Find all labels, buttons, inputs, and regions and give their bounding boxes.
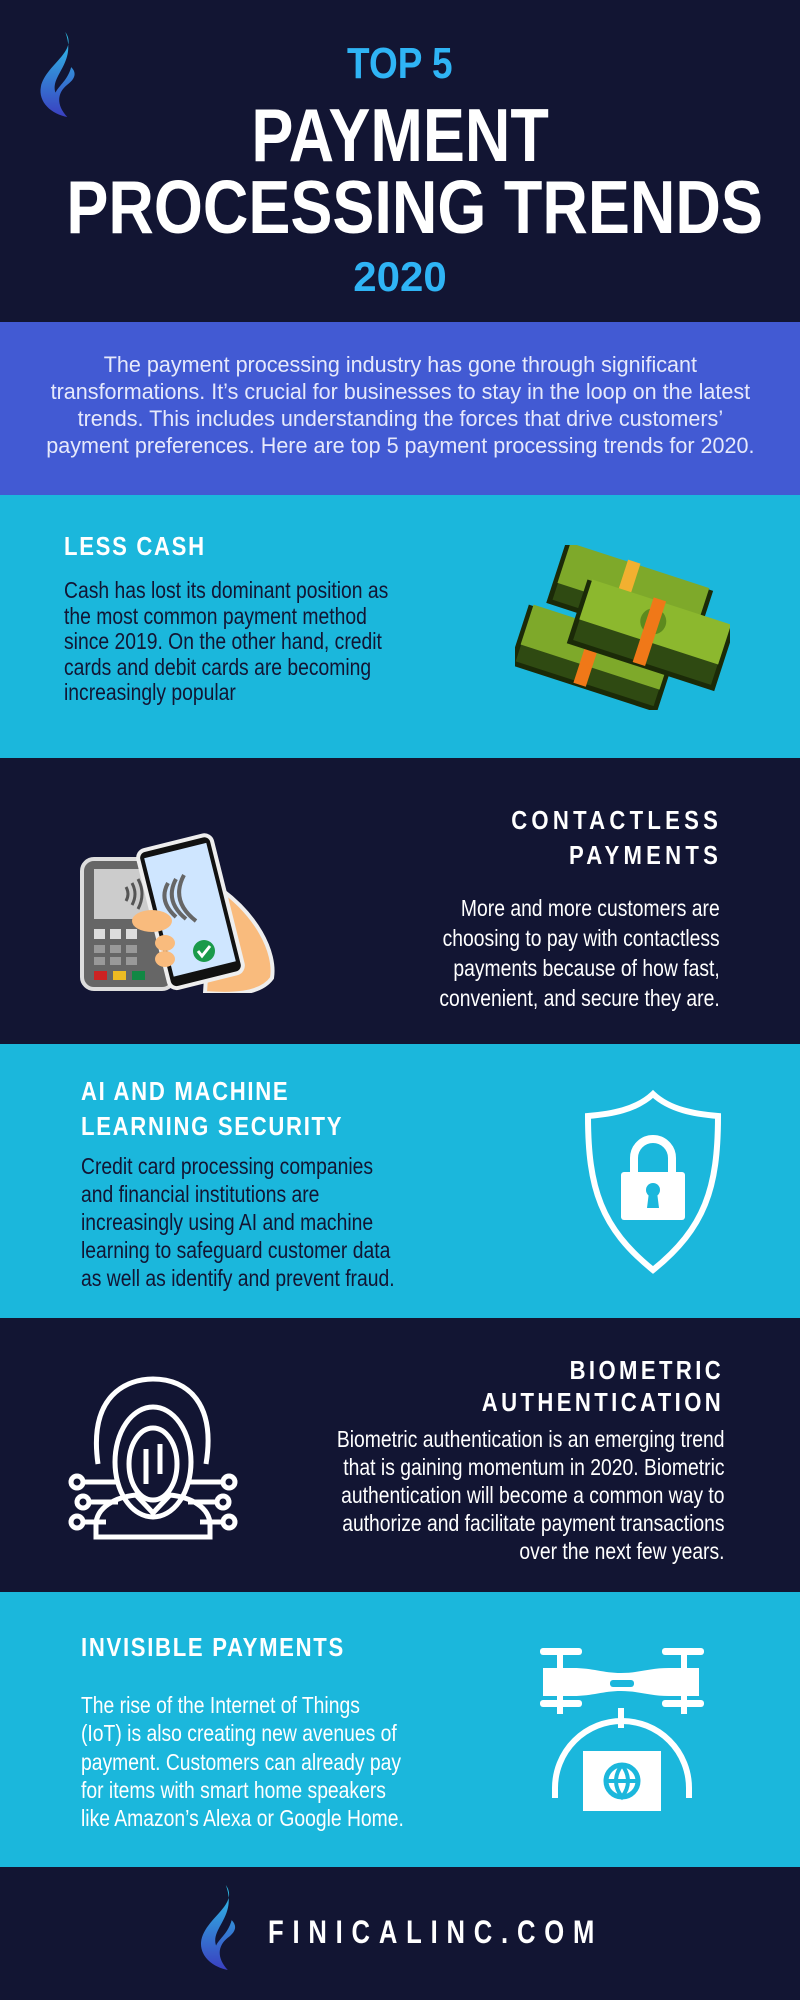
intro text: transformations. It’s crucial for businesses to stay in the loop on the latest <box>50 379 750 404</box>
text: less cash: cards and debit cards are becoming <box>64 654 371 680</box>
text: less cash <box>64 577 388 705</box>
text: biometric: over the next few years. <box>520 1538 725 1564</box>
text: invisible: like Amazon’s Alexa or Google Home. <box>81 1805 404 1831</box>
heading: contactless: PAYMENTS <box>569 840 722 870</box>
heading: contactless <box>511 805 722 870</box>
text: contactless <box>440 895 720 1011</box>
text: ai <box>81 1153 395 1291</box>
header panel <box>0 0 800 322</box>
panel: invisible payments <box>0 1592 800 1867</box>
heading: biometric: BIOMETRIC <box>569 1355 724 1385</box>
heading: ai: LEARNING SECURITY <box>81 1111 343 1141</box>
icon: shield lock <box>585 1090 721 1274</box>
text: biometric: authorize and facilitate payment transactions <box>343 1510 725 1536</box>
intro text <box>46 352 754 458</box>
text: less cash: Cash has lost its dominant position as <box>64 577 388 603</box>
icon: logo flame <box>40 32 75 117</box>
heading: contactless: CONTACTLESS <box>511 805 722 835</box>
title: 2020 <box>353 253 447 300</box>
panel: biometric <box>0 1318 800 1592</box>
icon: footer logo <box>201 1885 236 1970</box>
footer <box>0 1867 800 2000</box>
text: less cash: increasingly popular <box>64 679 236 705</box>
text: biometric: that is gaining momentum in 2020. Biometric <box>344 1454 725 1480</box>
icon: contactless terminal and phone <box>80 833 275 993</box>
heading: less cash: LESS CASH <box>64 531 206 561</box>
panel: less cash <box>0 495 800 758</box>
heading: biometric: AUTHENTICATION <box>482 1387 724 1417</box>
heading: biometric <box>482 1355 724 1417</box>
panel: ai security <box>0 1044 800 1318</box>
panel: contactless <box>0 758 800 1044</box>
text: ai: as well as identify and prevent fraud. <box>81 1265 395 1291</box>
icon: fingerprint person <box>68 1376 238 1540</box>
text: ai: learning to safeguard customer data <box>81 1237 390 1263</box>
text: contactless: convenient, and secure they are. <box>440 985 720 1011</box>
icon: money stacks <box>515 545 730 710</box>
footer website text: FINICALINC.COM <box>268 1914 603 1950</box>
text: invisible <box>81 1692 404 1831</box>
text: ai: Credit card processing companies <box>81 1153 373 1179</box>
text: biometric: Biometric authentication is an emerging trend <box>337 1426 725 1452</box>
text: less cash: the most common payment method <box>64 602 367 628</box>
text: ai: and financial institutions are <box>81 1181 319 1207</box>
text: biometric: authentication will become a common way to <box>342 1482 725 1508</box>
text: contactless: payments because of how fast, <box>454 955 720 981</box>
heading: ai: AI AND MACHINE <box>81 1076 289 1106</box>
text: contactless: choosing to pay with contactless <box>443 925 720 951</box>
title: PAYMENT <box>251 93 549 177</box>
text: ai: increasingly using AI and machine <box>81 1209 373 1235</box>
text: invisible: The rise of the Internet of Things <box>81 1692 360 1718</box>
text: invisible: payment. Customers can already pay <box>81 1749 401 1775</box>
text: less cash: since 2019. On the other hand, credit <box>64 628 382 654</box>
text: invisible: (IoT) is also creating new avenues of <box>81 1720 397 1746</box>
title: TOP 5 <box>347 39 453 88</box>
heading: ai <box>81 1076 343 1141</box>
intro text: payment preferences. Here are top 5 payment processing trends for 2020. <box>46 433 754 458</box>
text: invisible: for items with smart home speakers <box>81 1777 386 1803</box>
intro text: The payment processing industry has gone through significant <box>103 352 697 377</box>
title: PROCESSING TRENDS <box>66 165 763 249</box>
text: biometric <box>337 1426 725 1564</box>
intro text: trends. This includes understanding the forces that drive customers’ <box>77 406 723 431</box>
icon: delivery drone <box>540 1648 704 1811</box>
text: contactless: More and more customers are <box>461 895 720 921</box>
panel: intro <box>0 322 800 495</box>
heading: invisible: INVISIBLE PAYMENTS <box>81 1632 345 1662</box>
title <box>66 39 763 300</box>
